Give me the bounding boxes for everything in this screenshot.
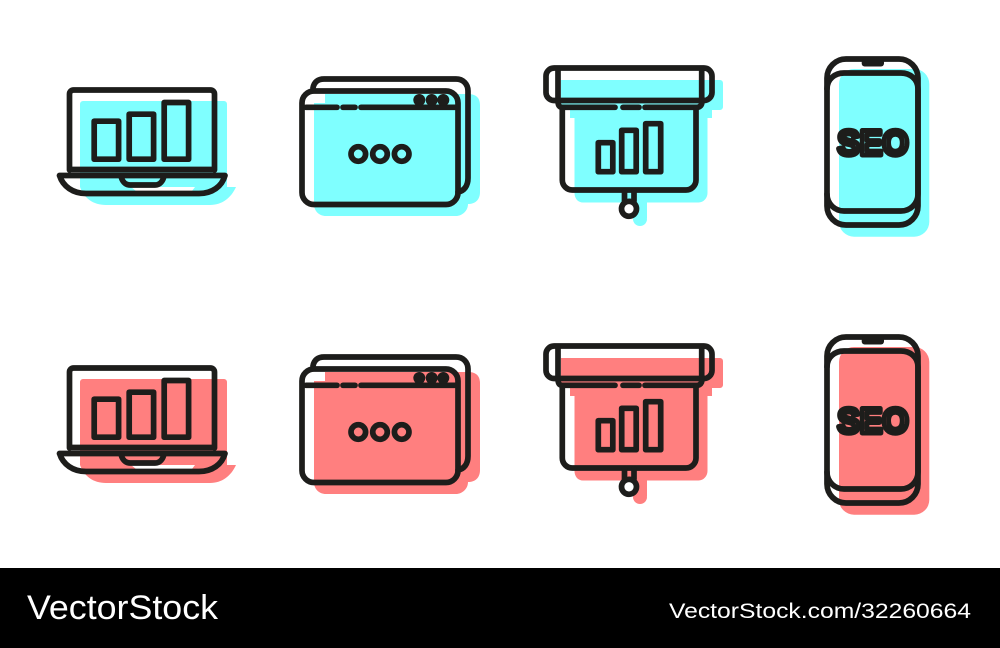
icon: smartphone with SEO, cyan <box>827 59 929 237</box>
footer image id: VectorStock.com/32260664 <box>669 599 971 623</box>
icon: projector screen with chart, cyan <box>546 68 723 226</box>
label: SEO: SEO <box>838 402 908 441</box>
icon: laptop with bar chart, red <box>60 368 236 483</box>
footer bar <box>0 568 1000 648</box>
icon: browser windows, cyan <box>302 79 480 216</box>
icon: projector screen with chart, red <box>546 346 723 504</box>
icon: browser windows, red <box>302 357 480 494</box>
footer brand name: VectorStock <box>27 589 219 627</box>
label: SEO: SEO <box>838 124 908 163</box>
icon: laptop with bar chart, cyan <box>60 90 236 205</box>
icon: smartphone with SEO, red <box>827 337 929 515</box>
